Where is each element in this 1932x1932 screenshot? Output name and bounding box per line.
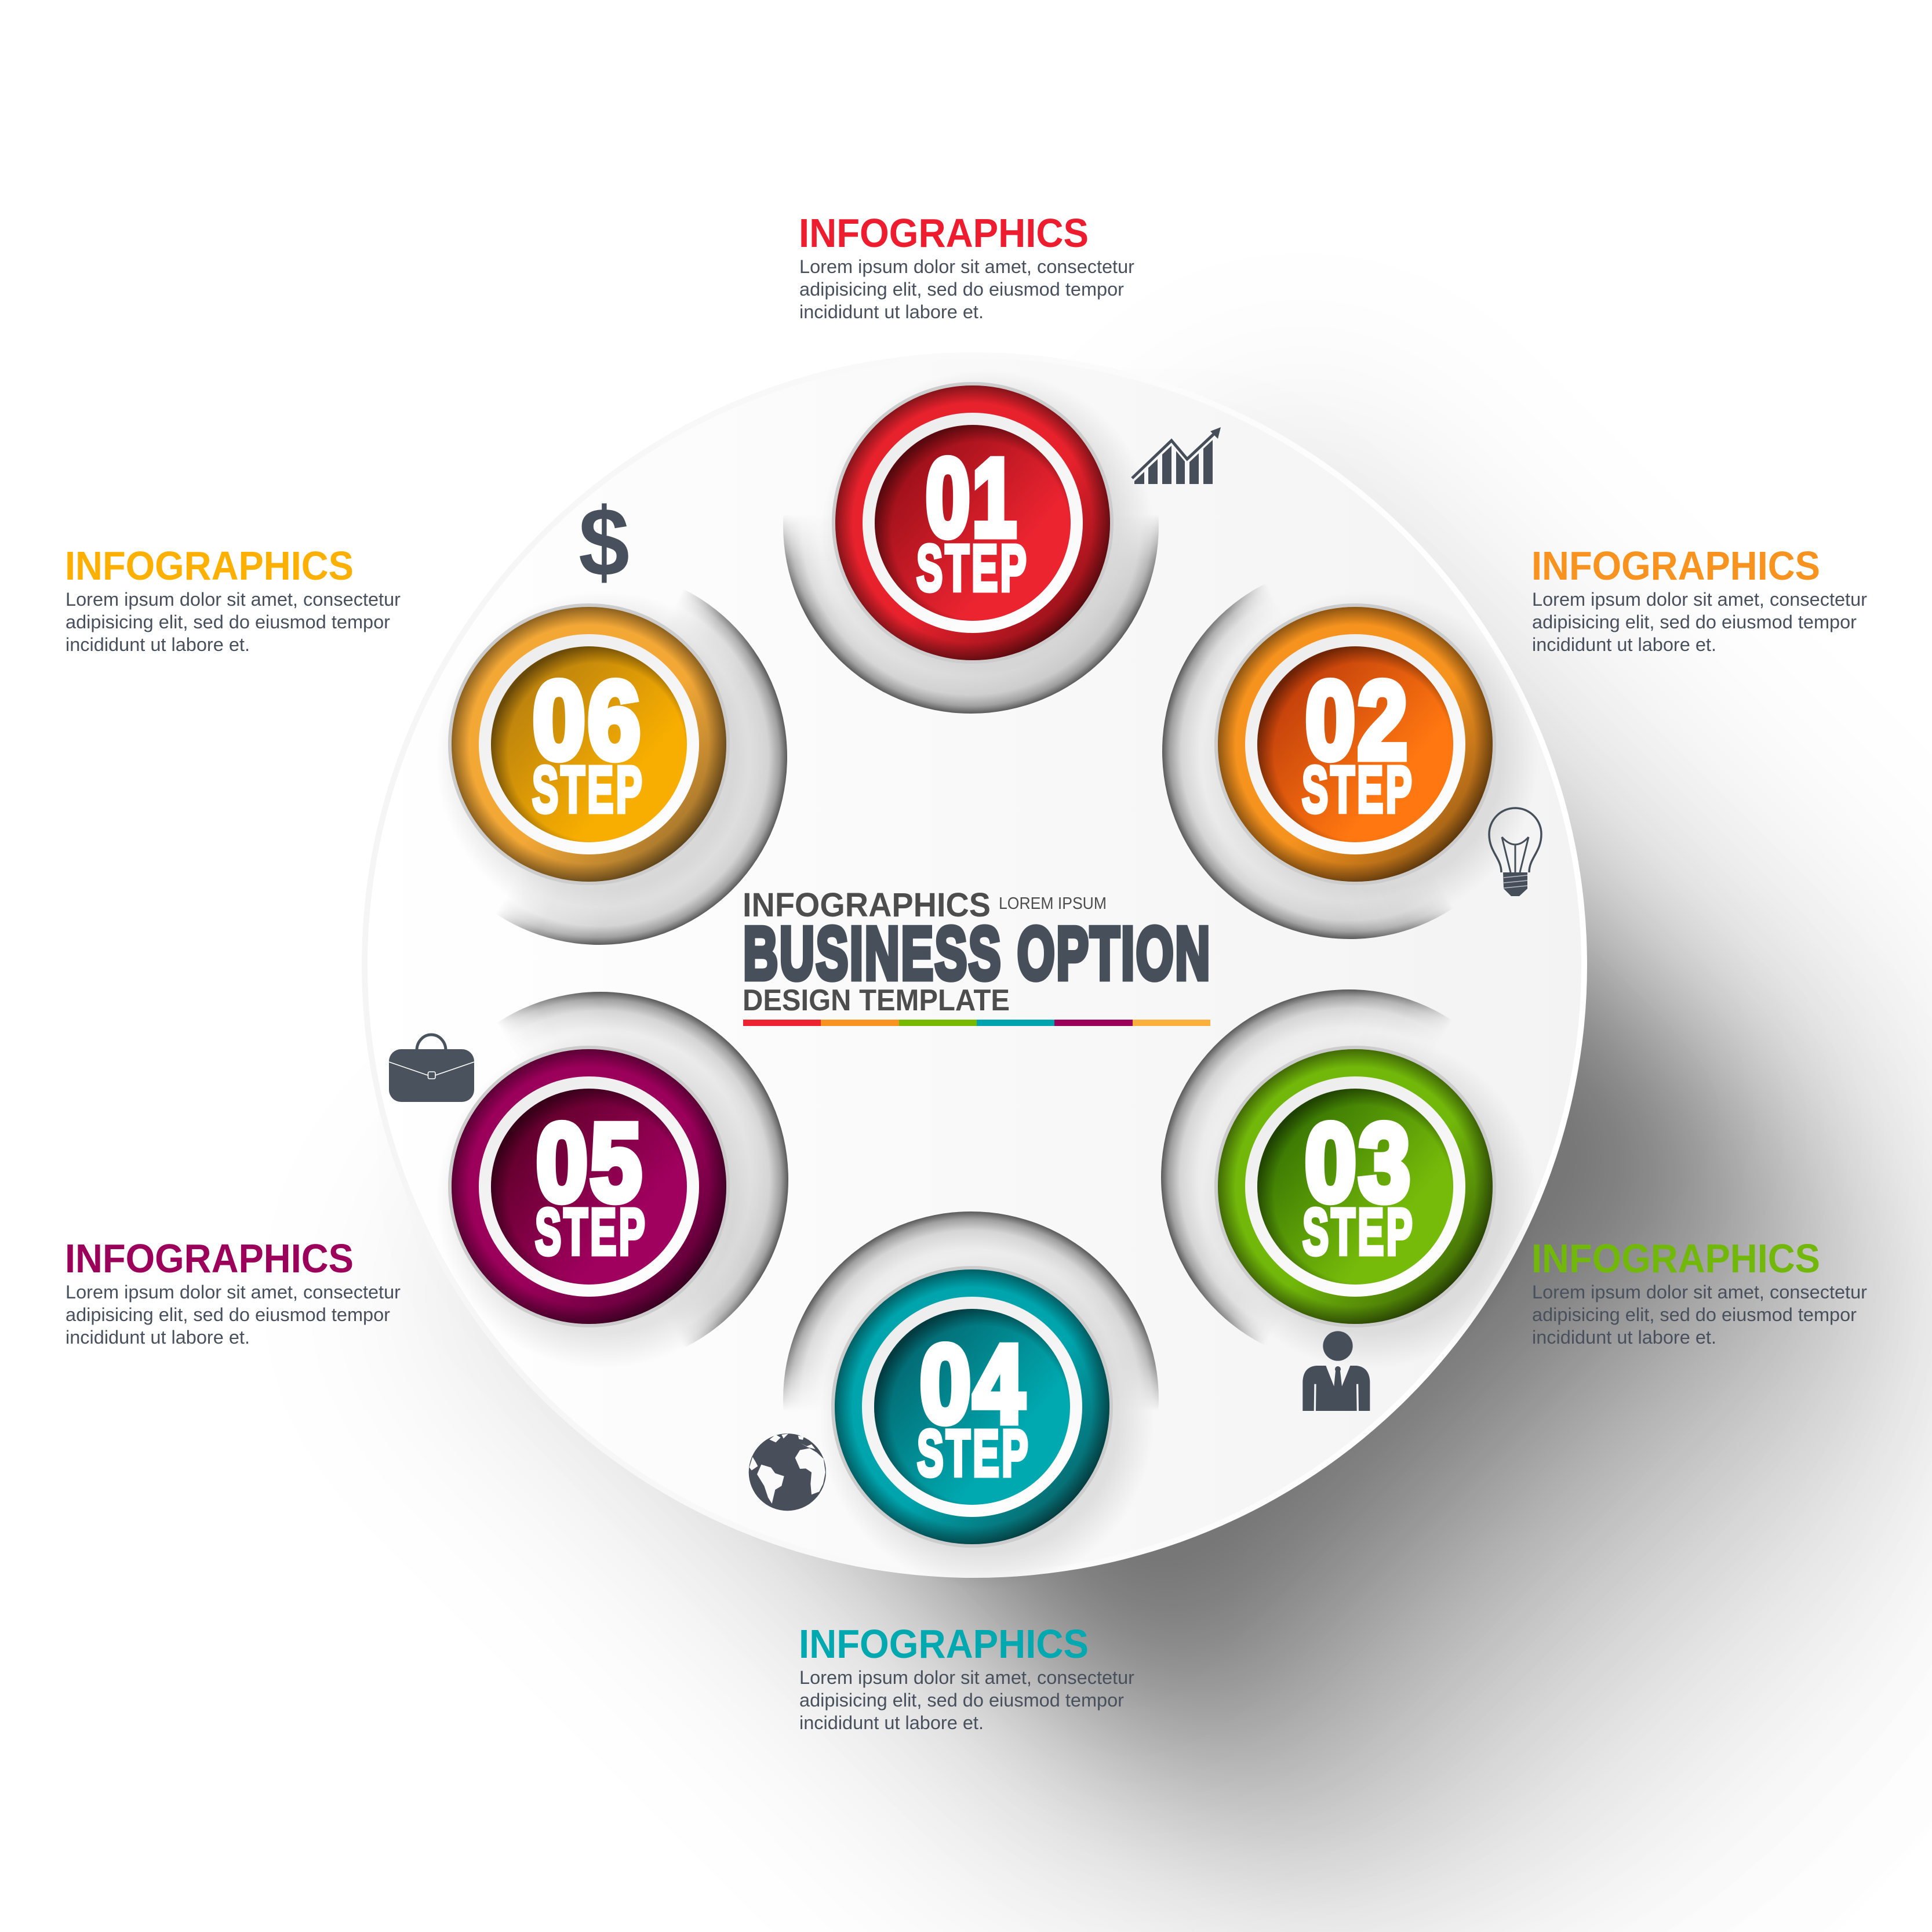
text block: step 03 — [1531, 1236, 1867, 1348]
text block: step 04: INFOGRAPHICS — [799, 1621, 1089, 1667]
icon: globe — [749, 1433, 826, 1511]
button: step 04 — [818, 1253, 1155, 1589]
text block: step 04 — [799, 1621, 1134, 1733]
number 02: 02 — [1305, 659, 1410, 782]
main disc — [362, 352, 1587, 1578]
label STEP: STEP — [1302, 753, 1414, 826]
button: step 02 — [1202, 591, 1538, 927]
title line: design template: DESIGN TEMPLATE — [743, 984, 1010, 1017]
title line: infographics: INFOGRAPHICS — [743, 886, 991, 924]
text block: step 06: incididunt ut labore et. — [66, 634, 250, 655]
label STEP: STEP — [916, 532, 1029, 605]
text block: step 01: adipisicing elit, sed do eiusmod tempor — [799, 279, 1124, 300]
text block: step 02: Lorem ipsum dolor sit amet, consectetur — [1532, 589, 1867, 610]
text block: step 03: adipisicing elit, sed do eiusmod tempor — [1532, 1304, 1857, 1325]
wide soft shadow — [401, 392, 1932, 1932]
number 05: 05 — [536, 1101, 644, 1224]
text block: step 04: adipisicing elit, sed do eiusmod tempor — [799, 1690, 1124, 1711]
text block: step 02 — [1531, 543, 1867, 655]
hollow: step 06 — [343, 500, 856, 1014]
text block: step 05: INFOGRAPHICS — [65, 1236, 354, 1281]
icon: light bulb — [1489, 808, 1541, 896]
text block: step 02: INFOGRAPHICS — [1531, 543, 1820, 588]
number 01: 01 — [926, 436, 1018, 559]
text block: step 01: Lorem ipsum dolor sit amet, consectetur — [799, 256, 1134, 277]
title tag: lorem ipsum: LOREM IPSUM — [999, 894, 1107, 913]
icon: rising bar chart — [1132, 427, 1221, 484]
central title block — [743, 886, 1211, 1026]
text block: step 06: adipisicing elit, sed do eiusmod tempor — [66, 612, 390, 632]
text block: step 06: INFOGRAPHICS — [65, 543, 354, 588]
text block: step 01: incididunt ut labore et. — [799, 301, 984, 322]
text block: step 03: INFOGRAPHICS — [1531, 1236, 1820, 1281]
text block: step 02: adipisicing elit, sed do eiusmod tempor — [1532, 612, 1857, 632]
text block: step 05: adipisicing elit, sed do eiusmod tempor — [66, 1304, 390, 1325]
icon: briefcase — [389, 1035, 474, 1102]
text block: step 05: incididunt ut labore et. — [66, 1327, 250, 1348]
label STEP: STEP — [917, 1417, 1031, 1490]
button: step 03 — [1202, 1033, 1538, 1369]
text block: step 04: incididunt ut labore et. — [799, 1712, 984, 1733]
hollow: step 04 — [783, 1211, 1159, 1587]
icon: dollar sign: $ — [578, 487, 630, 596]
colour bar — [743, 1020, 1210, 1026]
icon: businessman — [1302, 1331, 1370, 1411]
number 03: 03 — [1305, 1101, 1413, 1224]
number 04: 04 — [920, 1323, 1027, 1446]
text block: step 03: Lorem ipsum dolor sit amet, consectetur — [1532, 1282, 1867, 1302]
number 06: 06 — [533, 659, 643, 782]
long cast shadow — [540, 532, 1932, 1932]
text block: step 04: Lorem ipsum dolor sit amet, consectetur — [799, 1667, 1134, 1688]
hollow: step 05 — [344, 923, 857, 1436]
button: step 01 — [819, 369, 1155, 705]
hollow: step 02 — [1093, 494, 1607, 1008]
text block: step 05 — [65, 1236, 401, 1348]
text block: step 06: Lorem ipsum dolor sit amet, consectetur — [66, 589, 401, 610]
hollow: step 03 — [1092, 920, 1606, 1434]
hollow: step 01 — [783, 518, 1159, 714]
label STEP: STEP — [532, 753, 645, 826]
text block: step 01 — [799, 210, 1134, 322]
button: step 05 — [435, 1033, 772, 1369]
label STEP: STEP — [535, 1195, 647, 1268]
text block: step 05: Lorem ipsum dolor sit amet, consectetur — [66, 1282, 401, 1302]
text block: step 01: INFOGRAPHICS — [799, 210, 1089, 256]
text block: step 03: incididunt ut labore et. — [1532, 1327, 1716, 1348]
title line: business option: BUSINESS OPTION — [743, 912, 1211, 995]
button: step 06 — [435, 591, 772, 927]
label STEP: STEP — [1302, 1195, 1415, 1268]
text block: step 02: incididunt ut labore et. — [1532, 634, 1716, 655]
text block: step 06 — [65, 543, 401, 655]
